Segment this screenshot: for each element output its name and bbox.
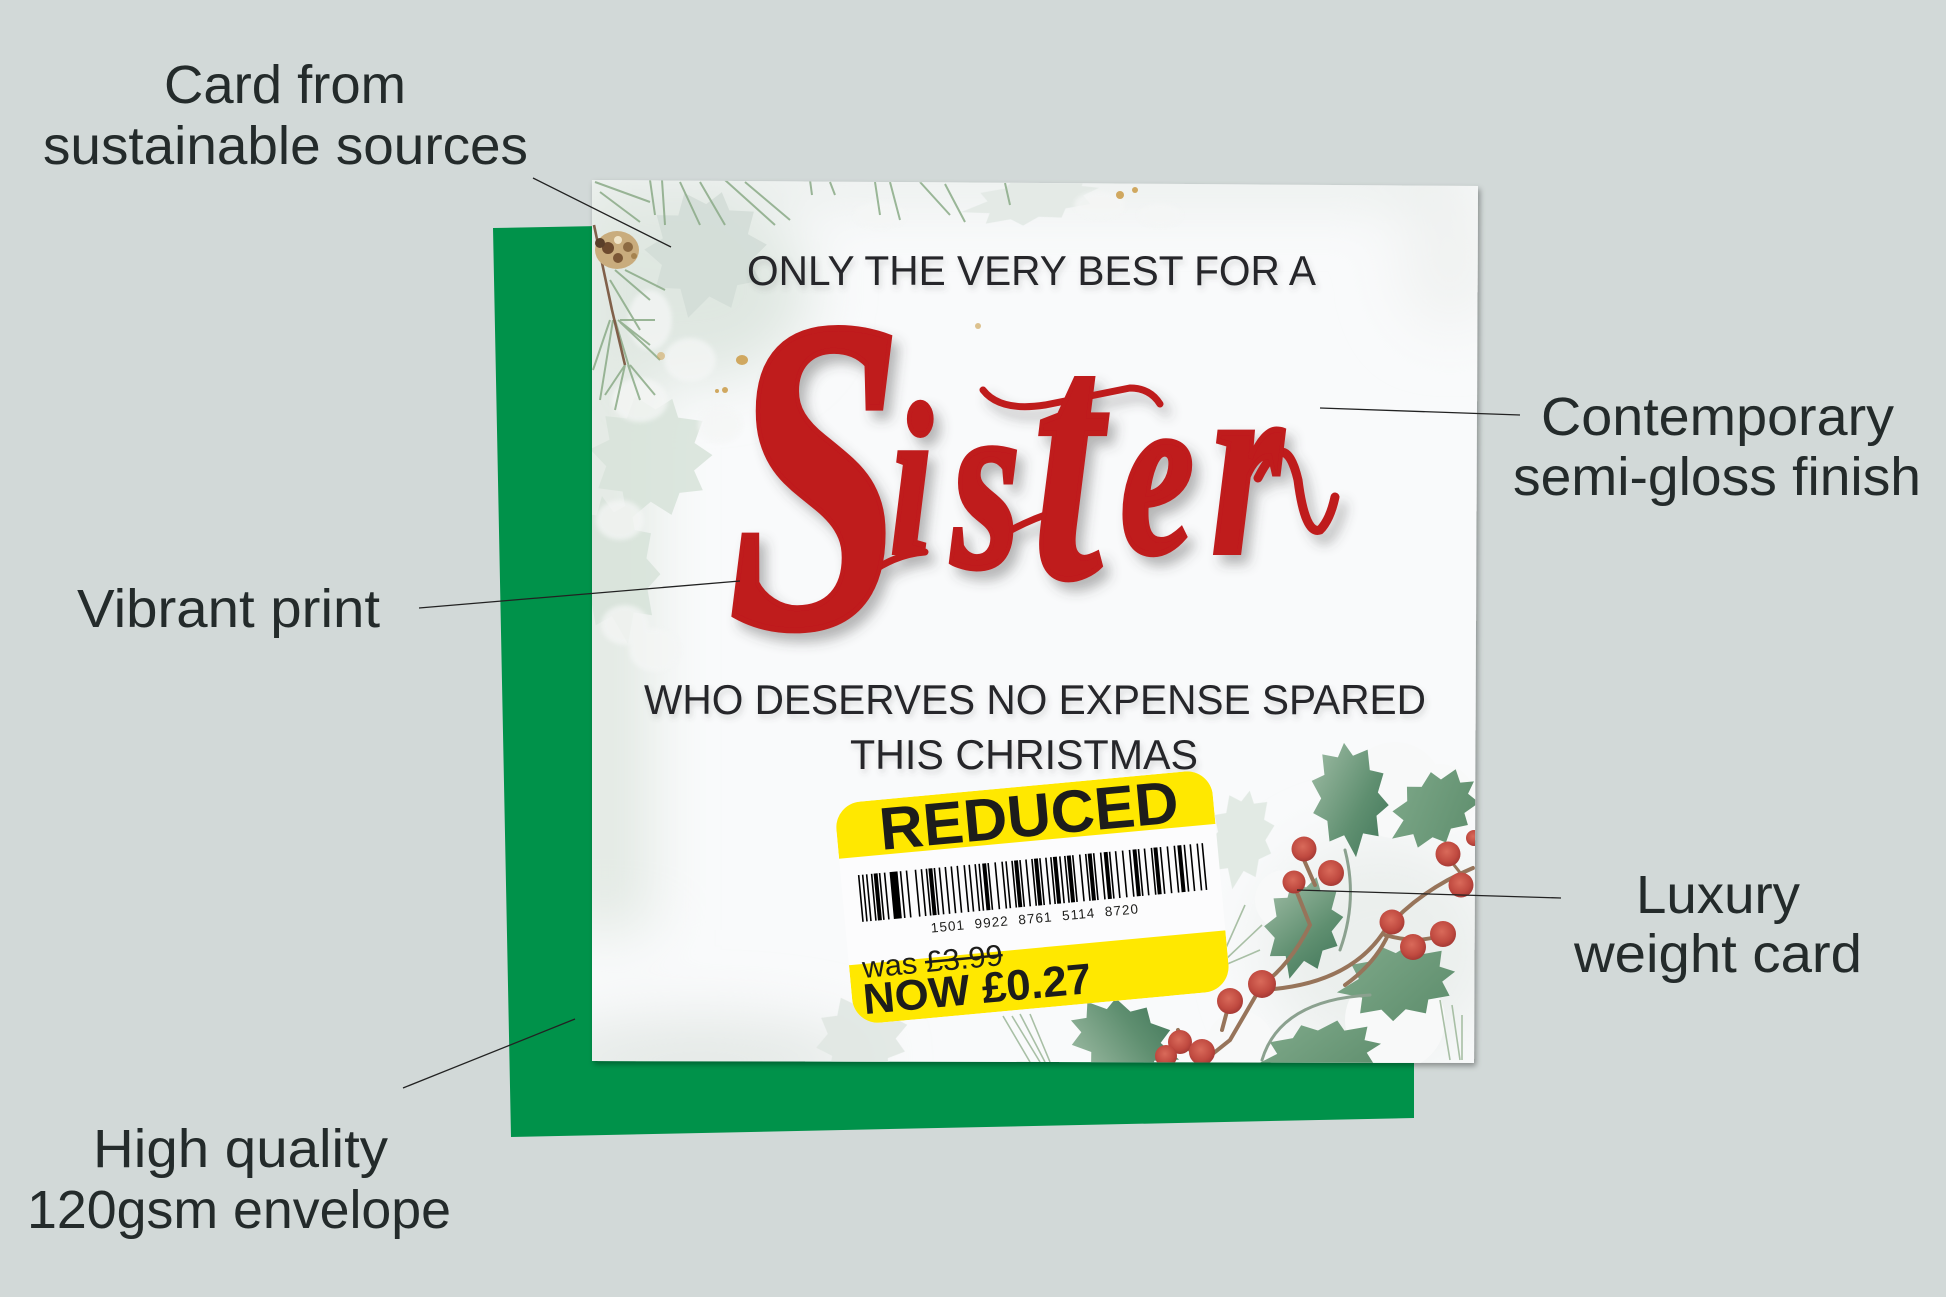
word: s bbox=[950, 344, 1020, 620]
callout: vibrant print: Vibrant print bbox=[77, 579, 380, 639]
green envelope bbox=[493, 226, 1414, 1137]
callout: luxury weight card: Luxury bbox=[1636, 865, 1800, 925]
stems bbox=[1178, 850, 1473, 1060]
reduced price sticker bbox=[834, 765, 1231, 1025]
greeting card bbox=[590, 180, 1484, 1070]
script heading: Sister bbox=[728, 226, 1335, 724]
pine needles near holly bbox=[1003, 905, 1462, 1062]
card text: this christmas: THIS CHRISTMAS bbox=[850, 731, 1198, 778]
barcode bbox=[859, 843, 1207, 922]
callout: contemporary finish bbox=[1320, 387, 1921, 507]
swash connectors bbox=[850, 388, 1160, 590]
watercolour wash bbox=[592, 180, 1474, 1063]
pine sprigs and pinecone bbox=[593, 180, 1138, 410]
card text: only the very best: ONLY THE VERY BEST FOR A bbox=[747, 247, 1316, 294]
callout: vibrant print bbox=[77, 579, 740, 639]
callout: envelope bbox=[27, 1019, 575, 1240]
white scallops bbox=[596, 196, 1090, 660]
callout: envelope: High quality bbox=[93, 1119, 388, 1179]
leaves bbox=[1071, 743, 1476, 1063]
callout: luxury weight card: weight card bbox=[1573, 924, 1862, 984]
barcode digits: 1501 9922 8761 5114 8720 bbox=[930, 901, 1139, 936]
was price: was £3.99 bbox=[860, 939, 1004, 985]
callout: sustainable sources: sustainable sources bbox=[43, 116, 528, 176]
callout: contemporary finish: Contemporary bbox=[1541, 387, 1894, 447]
berries bbox=[1155, 830, 1482, 1067]
sticker heading: REDUCED bbox=[876, 768, 1181, 863]
pinecone bbox=[595, 231, 639, 269]
word: e bbox=[1121, 342, 1194, 603]
word: t bbox=[1033, 266, 1110, 652]
word: S bbox=[728, 226, 903, 724]
callout: envelope: 120gsm envelope bbox=[27, 1180, 451, 1240]
now price: NOW £0.27 bbox=[861, 955, 1093, 1024]
callout: sustainable sources: Card from bbox=[164, 55, 406, 115]
holly and berries bbox=[1002, 743, 1476, 1063]
card text: who deserves no expense spared: WHO DESERVES NO EXPENSE SPARED bbox=[644, 676, 1426, 723]
callout: sustainable sources bbox=[43, 55, 671, 247]
word: r bbox=[1212, 320, 1284, 609]
gold flecks bbox=[657, 187, 1138, 393]
callout: luxury weight card bbox=[1297, 865, 1862, 984]
word: i bbox=[890, 362, 932, 600]
callout: contemporary finish: semi-gloss finish bbox=[1513, 447, 1921, 507]
pale holly leaves left bbox=[592, 183, 1274, 1062]
